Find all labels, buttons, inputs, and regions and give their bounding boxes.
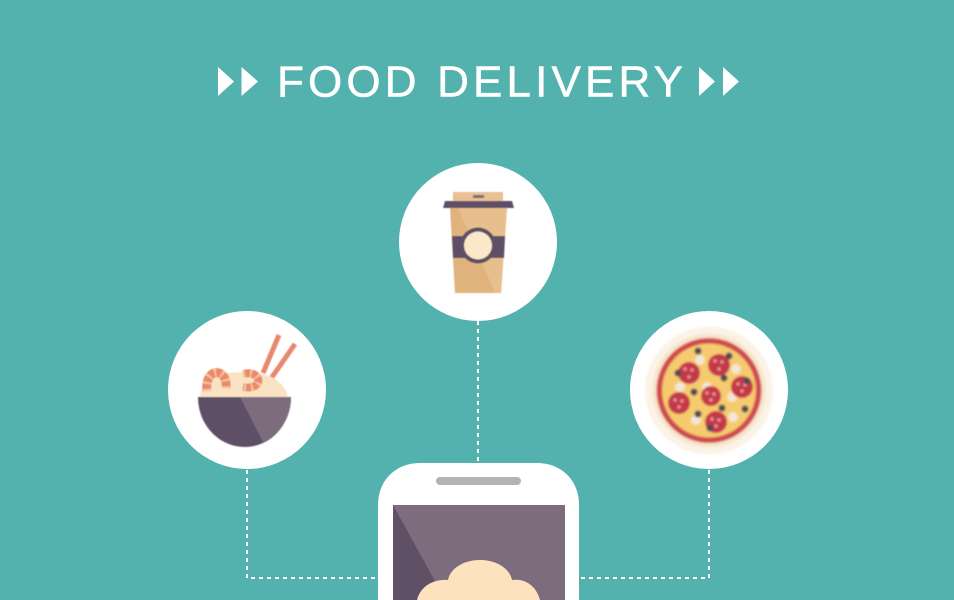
icon: noodle bowl with shrimp and chopsticks [198, 335, 295, 447]
phone screen [393, 505, 565, 600]
icon: pizza [645, 326, 773, 454]
bowl badge [168, 311, 326, 469]
phone speaker [436, 477, 521, 485]
pizza badge [630, 311, 788, 469]
dashed connector: coffee to phone [477, 321, 479, 463]
dashed connector: bowl to phone [247, 470, 378, 578]
icon: coffee cup [443, 192, 514, 293]
icon: right double arrow [699, 67, 739, 96]
dashed connector: pizza to phone [579, 470, 709, 578]
icon: left double arrow [218, 67, 258, 96]
title row [218, 58, 739, 106]
smartphone [378, 463, 579, 600]
icon: cloche cap [417, 560, 540, 600]
title: FOOD DELIVERY [277, 58, 683, 106]
coffee badge [399, 163, 557, 321]
